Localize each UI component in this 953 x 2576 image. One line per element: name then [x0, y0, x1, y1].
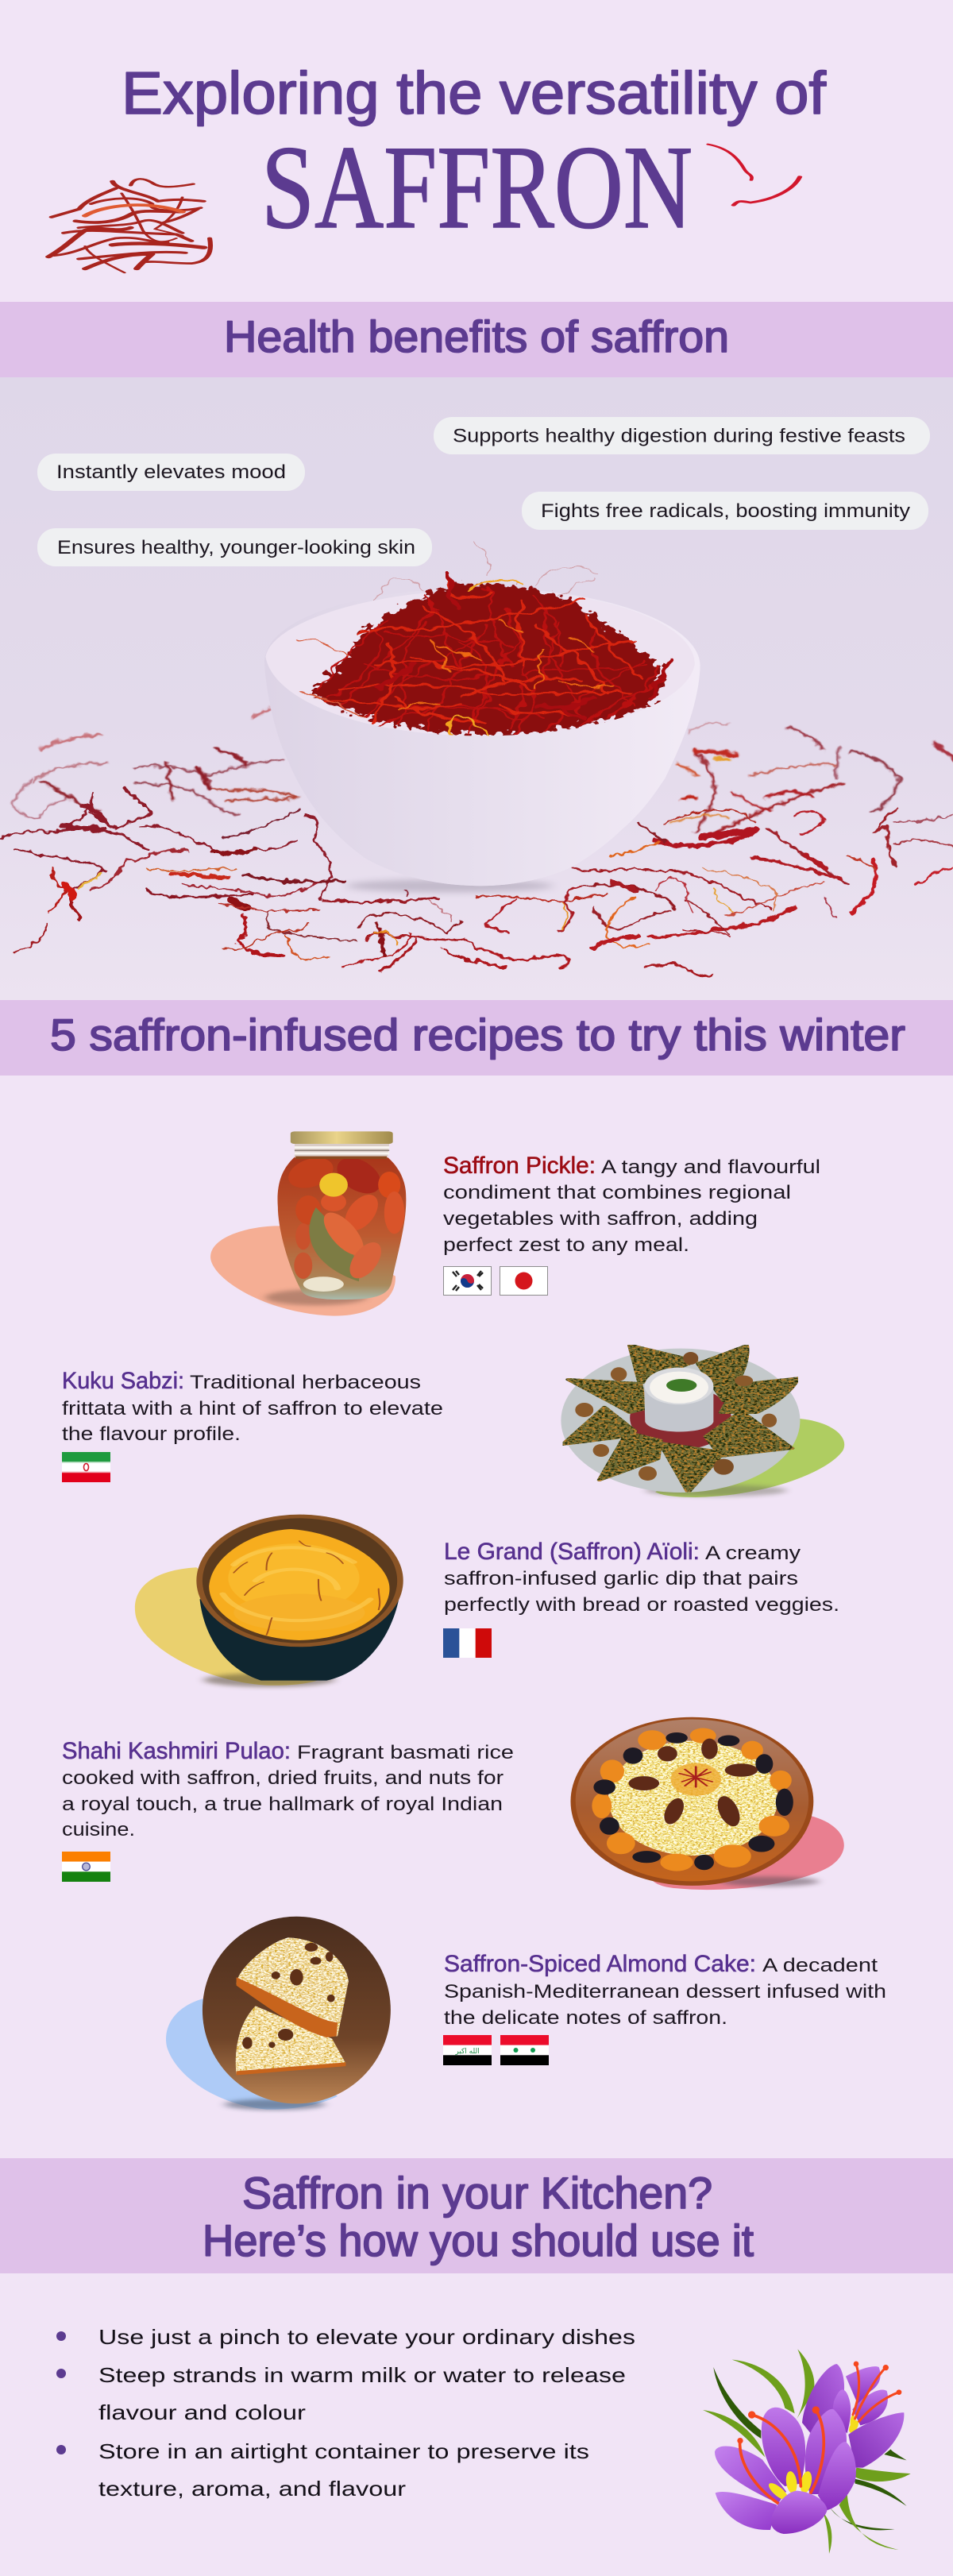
section header: recipes: 5 saffron-infused recipes to try this winter	[50, 1010, 905, 1060]
section header: health benefits: Health benefits of saffron	[224, 311, 729, 361]
text: kuku sabzi	[62, 1368, 443, 1445]
flag: iran	[62, 1452, 110, 1482]
image: pickle jar	[210, 1131, 406, 1316]
text: kuku sabzi: Kuku Sabzi:	[62, 1368, 184, 1394]
bullet list: kitchen tips	[56, 2325, 635, 2501]
text: pulao	[62, 1738, 514, 1840]
bowl	[264, 543, 700, 892]
text: saffron pickle: condiment that combines regional	[443, 1182, 791, 1203]
section header: saffron in your kitchen: Here’s how you should use it	[203, 2215, 754, 2265]
text: aioli: Le Grand (Saffron) Aïoli:	[444, 1539, 700, 1565]
image: kuku plate	[561, 1345, 844, 1497]
pill: mood	[37, 454, 305, 491]
text: cake: the delicate notes of saffron.	[444, 2007, 727, 2029]
text: saffron pickle: A tangy and flavourful	[601, 1157, 820, 1178]
image: pulao plate	[570, 1717, 844, 1890]
icon: saffron strands right	[708, 145, 800, 205]
flag: iraq: الله اكبر	[454, 2048, 480, 2056]
bowl interior	[265, 590, 695, 736]
icon: saffron strands left	[48, 179, 210, 272]
icon: crocus flowers	[703, 2349, 911, 2554]
photo: bowl of saffron	[0, 377, 953, 1000]
bowl shadow	[346, 879, 553, 892]
text: kuku sabzi: frittata with a hint of saffron to elevate	[62, 1398, 443, 1419]
tip: store: texture, aroma, and flavour	[98, 2477, 406, 2501]
recipe: aioli	[135, 1515, 839, 1687]
tip: steep: Steep strands in warm milk or water to release	[98, 2363, 626, 2387]
text: cake	[444, 1951, 886, 2029]
right table strands	[476, 724, 953, 976]
text: aioli	[444, 1539, 839, 1616]
text: cake: Saffron-Spiced Almond Cake:	[444, 1951, 756, 1977]
tip: steep	[56, 2363, 626, 2424]
flag: france	[443, 1628, 492, 1658]
pill: immunity	[522, 492, 928, 530]
text: aioli: A creamy	[705, 1543, 801, 1564]
recipe: almond cake	[166, 1917, 886, 2110]
text: aioli: perfectly with bread or roasted veggies.	[444, 1594, 839, 1616]
flag: iraq	[443, 2035, 492, 2065]
pill: digestion: Supports healthy digestion during festive feasts	[453, 426, 905, 446]
text: cake: A decadent	[762, 1955, 878, 1976]
recipe: saffron pickle	[210, 1131, 820, 1316]
tip: store: Store in an airtight container to preserve its	[98, 2439, 589, 2463]
flag: syria	[500, 2035, 549, 2065]
flag: india	[62, 1852, 110, 1882]
flag: south korea	[443, 1266, 491, 1295]
benefit pills	[37, 417, 930, 566]
text: pulao: Shahi Kashmiri Pulao:	[62, 1738, 291, 1764]
text: cake: Spanish-Mediterranean dessert infused with	[444, 1981, 886, 2002]
image: aioli bowl	[135, 1515, 403, 1687]
text: aioli: saffron-infused garlic dip that pairs	[444, 1568, 798, 1589]
tip: steep: flavour and colour	[98, 2400, 306, 2424]
text: pulao: Fragrant basmati rice	[297, 1742, 514, 1763]
recipe: shahi kashmiri pulao	[62, 1717, 844, 1890]
text: kuku sabzi: the flavour profile.	[62, 1423, 241, 1445]
heading word: saffron: SAFFRON	[261, 122, 693, 253]
left table strands	[0, 709, 476, 971]
tip: pinch: Use just a pinch to elevate your ordinary dishes	[98, 2325, 635, 2349]
bowl front	[264, 661, 700, 886]
recipe: kuku sabzi	[62, 1345, 844, 1497]
pill: skin: Ensures healthy, younger-looking skin	[57, 537, 415, 558]
heading line: exploring: Exploring the versatility of	[122, 60, 826, 126]
text: pulao: cuisine.	[62, 1819, 135, 1840]
section header: recipes	[0, 1000, 953, 1076]
pill: mood: Instantly elevates mood	[56, 462, 286, 483]
pill: digestion	[434, 417, 930, 454]
text: pulao: a royal touch, a true hallmark of royal Indian	[62, 1794, 503, 1815]
pill: skin	[37, 528, 432, 566]
tip: store	[56, 2439, 589, 2501]
section header: health benefits	[0, 302, 953, 377]
text: saffron pickle	[443, 1153, 820, 1256]
bowl outer	[264, 588, 700, 886]
image: cake on wooden plate	[166, 1917, 391, 2110]
section header: saffron in your kitchen	[0, 2158, 953, 2273]
pill: immunity: Fights free radicals, boosting immunity	[541, 500, 910, 522]
title	[122, 60, 826, 253]
text: pulao: cooked with saffron, dried fruits, and nuts for	[62, 1767, 504, 1789]
text: kuku sabzi: Traditional herbaceous	[190, 1372, 421, 1393]
text: saffron pickle: vegetables with saffron, adding	[443, 1208, 758, 1230]
text: saffron pickle: Saffron Pickle:	[443, 1153, 596, 1179]
lower flower	[715, 2406, 856, 2534]
section header: saffron in your kitchen: Saffron in your Kitchen?	[242, 2168, 712, 2218]
flag: japan	[500, 1266, 548, 1295]
upper flower	[802, 2362, 904, 2468]
saffron mound	[298, 543, 669, 736]
text: saffron pickle: perfect zest to any meal.	[443, 1234, 689, 1256]
